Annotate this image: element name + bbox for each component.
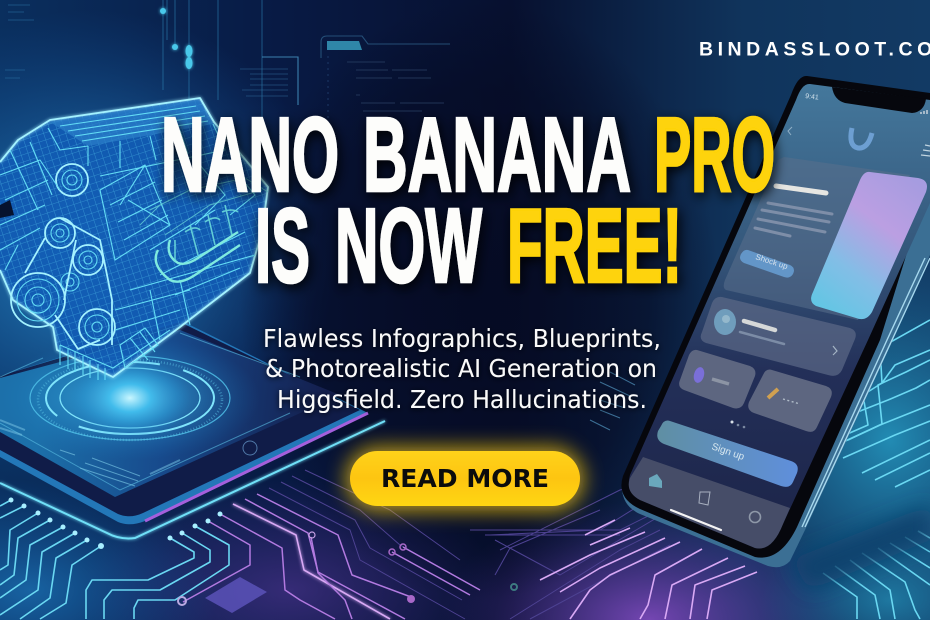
status time: 9:41 (805, 93, 819, 102)
sign up button: Sign up (710, 441, 746, 463)
main title: PRO (654, 96, 775, 214)
main title: BANANA (363, 96, 631, 214)
decorative top data lines and nodes (5, 0, 298, 120)
hologram engine (0, 98, 268, 380)
main title: IS (255, 187, 310, 305)
sign up button (657, 421, 798, 487)
small card B (748, 370, 832, 432)
tablet with hologram base (0, 320, 368, 524)
tablet data block (60, 450, 140, 486)
subtitle: & Photorealistic AI Generation on (265, 354, 657, 383)
small card A (679, 350, 755, 408)
profile card (701, 297, 856, 376)
nav icon app (699, 492, 710, 505)
gradient hero panel (811, 172, 927, 319)
phone black bezel (621, 76, 930, 558)
circuit traces: cyan lower left (0, 421, 385, 619)
tablet metal edge (0, 320, 368, 524)
menu icon (921, 145, 930, 156)
phone screen (629, 84, 930, 548)
tablet bezel (0, 322, 360, 516)
phone shadow (790, 505, 930, 590)
tablet screen (0, 330, 340, 497)
hologram rings (30, 356, 230, 440)
smartphone (621, 76, 930, 590)
subtitle: Higgsfield. Zero Hallucinations. (277, 385, 647, 414)
main title: NANO (161, 96, 339, 214)
circuit traces: left of phone (590, 372, 635, 430)
heading bar (776, 186, 826, 193)
small button: Shock up (754, 252, 789, 271)
subtitle: Flawless Infographics, Blueprints, (263, 324, 661, 353)
engine intake manifold (140, 178, 268, 282)
read more button (346, 447, 584, 511)
notch (832, 87, 926, 113)
read more button: READ MORE (381, 464, 549, 493)
engine pulleys (11, 164, 115, 345)
circuit traces: purple under phone (540, 520, 757, 619)
logo magnet (851, 128, 872, 148)
text lines (755, 203, 832, 236)
circuit traces: purple centre bottom (233, 470, 700, 619)
pager dots (730, 420, 745, 428)
engine valve cover (48, 100, 225, 176)
main title (161, 96, 775, 305)
engine belt and block (0, 142, 255, 380)
main title: NOW (335, 187, 482, 305)
nav icon settings (750, 512, 760, 522)
small button (740, 250, 794, 278)
main app card (724, 157, 910, 320)
phone metal highlight (802, 258, 930, 527)
subtitle (263, 324, 661, 414)
phone metal body (622, 200, 930, 567)
home indicator (671, 510, 721, 530)
bottom navigation bar (629, 457, 790, 548)
nav icon home (649, 474, 662, 488)
main title: FREE! (507, 187, 682, 305)
circuit chip (205, 577, 267, 613)
blueprint code panel (321, 36, 450, 118)
circuit traces: cyan right (823, 320, 930, 619)
signal icon (921, 110, 927, 114)
back chevron (788, 127, 792, 135)
